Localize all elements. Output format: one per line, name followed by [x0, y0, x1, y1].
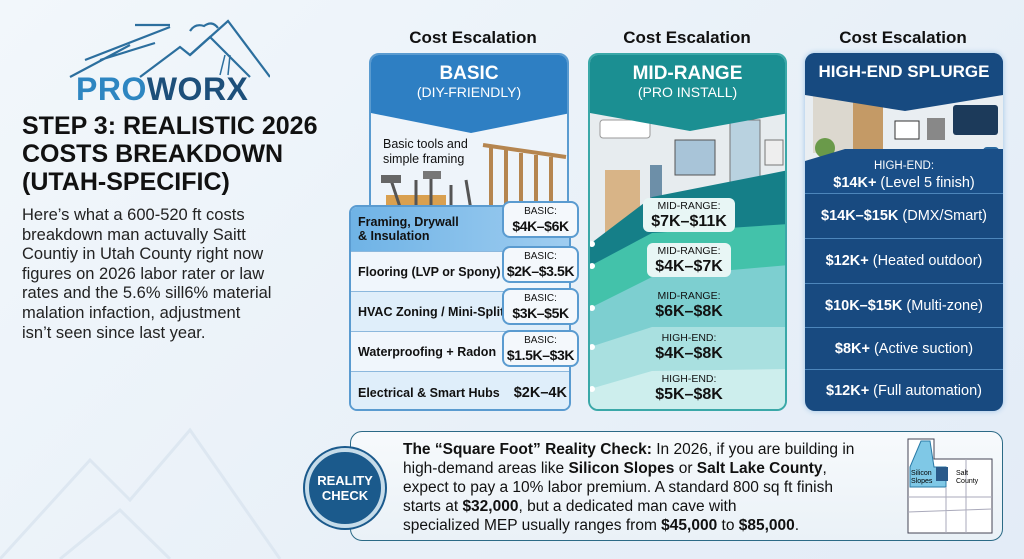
- title: STEP 3: REALISTIC 2026: [22, 112, 317, 140]
- value: high 5: HIGH-END:: [662, 373, 716, 385]
- intro text: Here’s what a 600-520 ft costs: [22, 206, 245, 224]
- callout text: starts at $32,000, but a dedicated man cave with: [403, 498, 736, 515]
- row: high 3: $12K+: [826, 253, 869, 269]
- heading: mid: Cost Escalation: [623, 28, 751, 47]
- badge: flooring: BASIC:: [524, 251, 557, 262]
- row: high 6: [826, 382, 982, 398]
- title: (UTAH-SPECIFIC): [22, 168, 230, 196]
- intro text: [22, 206, 271, 342]
- rows: [349, 205, 571, 411]
- row: high 6: $12K+: [826, 382, 869, 398]
- row: waterproofing: Waterproofing + Radon: [358, 344, 496, 358]
- callout text: high-demand areas like Silicon Slopes or Salt Lake County,: [403, 460, 827, 477]
- caption: [383, 137, 468, 166]
- value: high 4: $4K–$8K: [655, 345, 723, 362]
- panel: basic: BASIC: [439, 63, 499, 84]
- row: high 5: [805, 328, 1003, 370]
- value: mid 1: [643, 198, 735, 232]
- title: [22, 112, 317, 196]
- caption: simple framing: [383, 152, 464, 166]
- value: mid 2: [647, 243, 731, 277]
- badge: framing: BASIC:: [524, 206, 557, 217]
- intro text: malation infaction, adjustment: [22, 304, 240, 322]
- value: mid 2: $4K–$7K: [655, 258, 723, 275]
- illustration: luxury finishes: [805, 95, 1003, 161]
- value: mid 3: $6K–$8K: [655, 303, 723, 320]
- row: high 4: [805, 284, 1003, 328]
- row: high 1: HIGH-END:: [874, 160, 934, 172]
- row: high 5: (Active suction): [874, 340, 973, 356]
- badge: hvac: [502, 288, 579, 325]
- illustration: tools and framing: [381, 143, 566, 205]
- panel: basic: (DIY-FRIENDLY): [417, 84, 521, 100]
- panel: mid-range: (PRO INSTALL): [638, 84, 737, 100]
- value: mid 3: [655, 290, 723, 320]
- row: high 1: $14K+ (Level 5 finish): [833, 175, 975, 191]
- row: hvac: HVAC Zoning / Mini-Split: [358, 304, 504, 318]
- intro text: Countiy in Utah County right now: [22, 245, 263, 263]
- row: high 3: [805, 239, 1003, 284]
- callout text: [403, 441, 854, 534]
- panel: mid-range: [588, 53, 787, 411]
- badge: reality check: [305, 448, 385, 528]
- row: flooring: Flooring (LVP or Spony): [358, 264, 501, 278]
- heading: high: Cost Escalation: [839, 28, 967, 47]
- row: waterproofing: [351, 332, 571, 372]
- badge: framing: [502, 201, 579, 238]
- intro text: figures on 2026 labor rater or law: [22, 265, 264, 283]
- value: mid 1: $7K–$11K: [651, 213, 727, 230]
- badge: waterproofing: BASIC:: [524, 335, 557, 346]
- row: electrical: $2K–4K: [514, 384, 567, 400]
- row: high 6: (Full automation): [873, 382, 982, 398]
- value: high 5: [655, 373, 723, 403]
- header band: [805, 53, 1003, 111]
- callout text: The “Square Foot” Reality Check: In 2026, if you are building in: [403, 441, 854, 458]
- value: high 4: HIGH-END:: [662, 332, 716, 344]
- intro text: rates and the 5.6% sill6% material: [22, 284, 271, 302]
- map: utah: Slopes: [911, 478, 933, 485]
- panel: high-end: HIGH-END SPLURGE: [819, 62, 989, 81]
- row: electrical: [351, 372, 571, 413]
- row: high 4: (Multi-zone): [906, 298, 983, 314]
- callout text: specialized MEP usually ranges from $45,000 to $85,000.: [403, 517, 799, 534]
- row: flooring: [351, 252, 571, 292]
- badge: reality check: REALITY: [317, 473, 373, 488]
- badge: waterproofing: $1.5K–$3K: [507, 347, 574, 363]
- badge: reality check: CHECK: [322, 488, 368, 503]
- brand name: PROWORX: [76, 71, 248, 107]
- panel: basic: [349, 53, 571, 411]
- callout text: expect to pay a 10% labor premium. A standard 800 sq ft finish: [403, 479, 833, 496]
- row: high 2: [805, 194, 1003, 239]
- badge: hvac: $3K–$5K: [512, 305, 569, 321]
- icon: mountains: [70, 19, 270, 78]
- value: high 4: [655, 332, 723, 362]
- map: utah: Silicon: [911, 470, 932, 477]
- logo: [70, 19, 270, 107]
- value: high 5: $5K–$8K: [655, 386, 723, 403]
- badge: hvac: BASIC:: [524, 293, 557, 304]
- row: hvac: [351, 292, 571, 332]
- row: high 4: $10K–$15K: [825, 298, 902, 314]
- row: framing: & Insulation: [358, 229, 430, 243]
- panel: high-end: [805, 53, 1003, 411]
- row: framing: [351, 207, 571, 252]
- map: utah: [908, 438, 992, 534]
- row: high 3: (Heated outdoor): [873, 253, 982, 269]
- intro text: breakdown man actuvally Saitt: [22, 226, 246, 244]
- row: high 2: $14K–$15K: [821, 208, 898, 224]
- illustration: pro install room: [590, 114, 785, 242]
- heading: basic: Cost Escalation: [409, 28, 537, 47]
- panel: mid-range: MID-RANGE: [633, 63, 742, 84]
- header band: [371, 55, 567, 133]
- callout: reality check: [350, 431, 1003, 541]
- caption: Basic tools and: [383, 137, 468, 151]
- background mountains decoration: [0, 428, 281, 559]
- title: COSTS BREAKDOWN: [22, 140, 283, 168]
- map: utah: Salt: [956, 470, 968, 477]
- map: utah: County: [956, 478, 979, 485]
- badge: flooring: [502, 246, 579, 283]
- badge: flooring: $2K–$3.5K: [507, 263, 574, 279]
- value: mid 3: MID-RANGE:: [658, 290, 720, 302]
- row: high 1: [805, 149, 1003, 194]
- intro text: isn’t seen since last year.: [22, 324, 205, 342]
- value: mid 1: MID-RANGE:: [658, 200, 720, 212]
- header band: [590, 55, 785, 131]
- row: framing: Framing, Drywall: [358, 215, 459, 229]
- row: high 2: (DMX/Smart): [902, 208, 987, 224]
- bands: [590, 170, 785, 409]
- badge: framing: $4K–$6K: [512, 218, 569, 234]
- row: high 5: $8K+: [835, 340, 870, 356]
- value: mid 2: MID-RANGE:: [657, 245, 720, 257]
- row: electrical: Electrical & Smart Hubs: [358, 386, 500, 400]
- badge: waterproofing: [502, 330, 579, 367]
